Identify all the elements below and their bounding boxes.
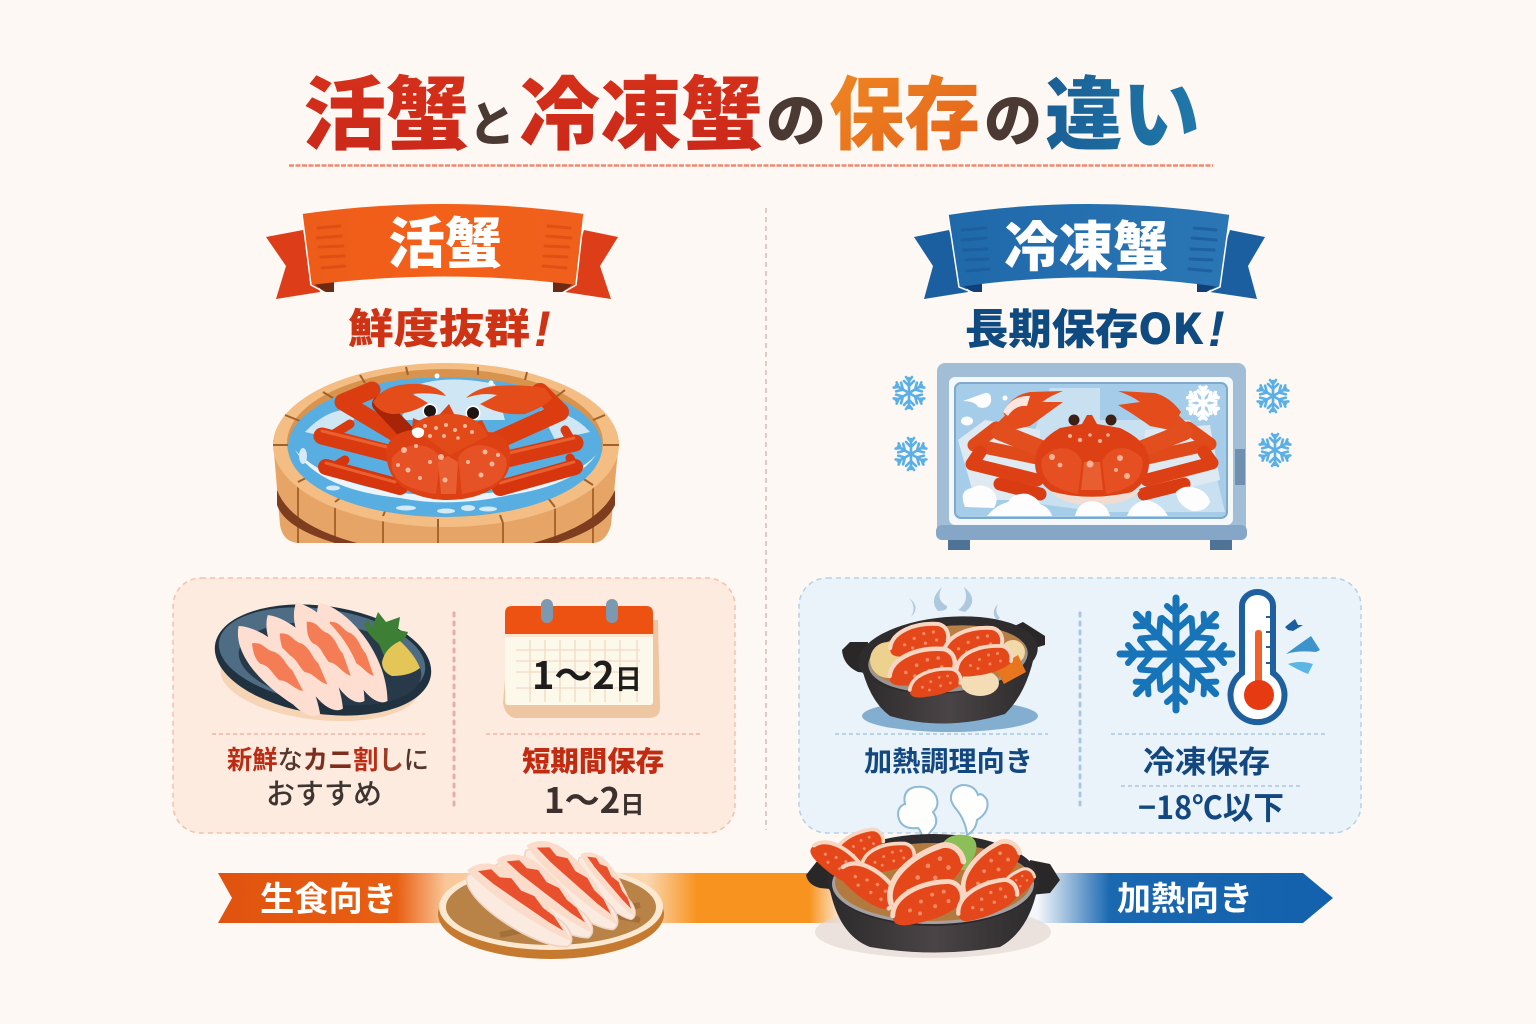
title: 冷凍蟹 [519, 51, 763, 167]
arrow: raw to cooked [218, 872, 1333, 923]
arrow label right: 加熱向き [1117, 872, 1253, 920]
divider [452, 613, 456, 810]
ribbon label: 活蟹 [388, 199, 502, 279]
illustration: crab sushi plate [438, 831, 664, 959]
label: frozen storage: 冷凍保存 [1143, 737, 1270, 782]
label: temperature: −18℃以下 [1138, 783, 1284, 829]
panel: frozen crab [799, 578, 1361, 833]
ribbon stripes [317, 226, 571, 268]
title: の [984, 74, 1042, 158]
label: sashimi: おすすめ [266, 771, 382, 813]
ribbon: frozen crab [914, 203, 1265, 299]
crab [322, 390, 575, 488]
label: short-term storage: 1～2日 [544, 773, 644, 824]
icon: hot pot [842, 587, 1045, 732]
title: の [766, 74, 826, 158]
label: short-term storage: 短期間保存 [522, 740, 664, 780]
title: 違い [1045, 51, 1200, 167]
center divider [765, 208, 767, 830]
arrow label left: 生食向き [260, 872, 397, 921]
title: 保存 [829, 51, 980, 167]
ribbon: live crab [266, 199, 618, 299]
label: sashimi: 新鮮なカニ割しに [227, 740, 429, 777]
ribbon stripes [962, 228, 1216, 271]
crab eyes [1068, 414, 1080, 426]
crab shell [386, 404, 510, 500]
crab claws [1003, 391, 1063, 430]
snowflake in window [1187, 387, 1219, 419]
title: と [469, 85, 515, 155]
divider [1078, 613, 1082, 810]
title underline [289, 164, 1213, 167]
illustration: live crab in wooden tub [273, 363, 619, 543]
tub rim [273, 363, 619, 527]
crab [972, 415, 1212, 494]
panel: live crab [173, 578, 735, 833]
label: cooking: 加熱調理向き [864, 740, 1033, 780]
illustration: frozen crab in freezer [936, 363, 1247, 550]
snowflakes around freezer [893, 377, 1291, 470]
icon: thermometer [1230, 592, 1320, 722]
icon: calendar [503, 599, 660, 718]
tub water [288, 377, 602, 517]
illustration: cooked crab pot [806, 826, 1060, 958]
subtitle: long storage: ! [1208, 301, 1225, 357]
freezer handle [1235, 449, 1245, 485]
label: sashimi [227, 740, 429, 813]
freezer body [948, 538, 970, 550]
ribbon label: 冷凍蟹 [1004, 203, 1168, 282]
snow [961, 393, 1210, 516]
title: 活蟹 [303, 51, 469, 167]
title [303, 51, 1200, 167]
subtitle: long storage: 長期保存OK [965, 296, 1204, 357]
crab eyes [422, 404, 438, 418]
freezer window [955, 383, 1227, 518]
illustration: steam [898, 785, 988, 850]
icon: snowflake [1120, 598, 1232, 710]
subtitle: freshness: ! [534, 301, 551, 357]
icon: sashimi plate [208, 591, 438, 730]
crab claws [373, 384, 446, 414]
tub body [273, 440, 619, 543]
calendar date: 1～2日 [532, 645, 642, 700]
label: short-term storage [522, 740, 664, 824]
subtitle: freshness: 鮮度抜群 [348, 295, 530, 355]
crab shell [1035, 415, 1149, 502]
